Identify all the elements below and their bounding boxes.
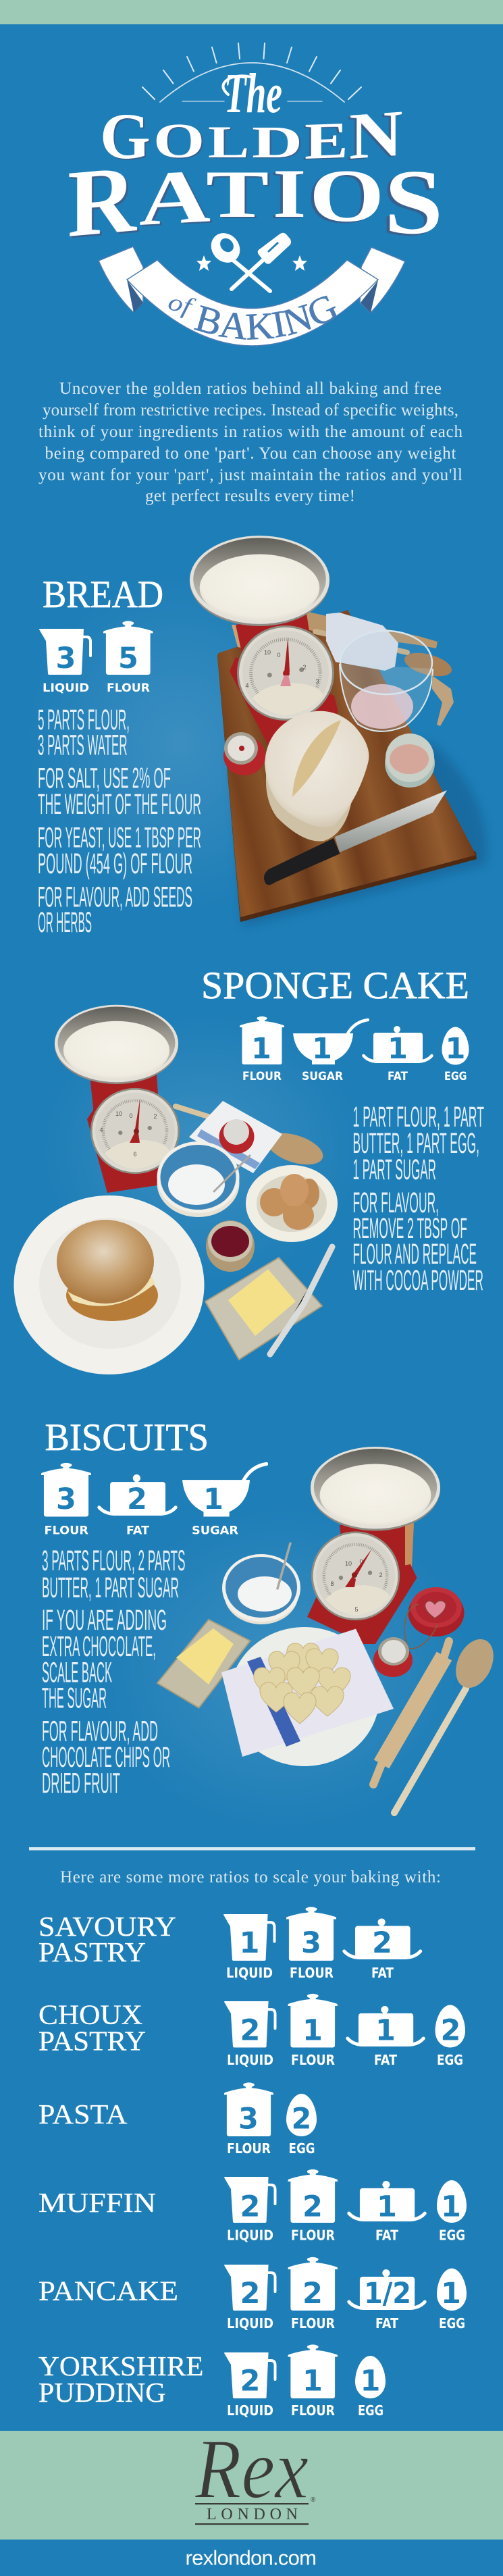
weighing pan with flour	[55, 1005, 178, 1084]
intro paragraph: get perfect results every time!	[145, 487, 355, 505]
timer	[219, 1119, 254, 1154]
row icons: FAT	[375, 2315, 398, 2332]
title word: Golden: L	[208, 117, 249, 168]
title word: The	[223, 62, 282, 125]
title word: Ratios: S	[384, 151, 443, 253]
logo: Rex London: Rex	[194, 2423, 309, 2517]
row icons: 1	[240, 1926, 259, 1960]
weighing pan with flour	[190, 536, 329, 626]
row icons: 2	[302, 2190, 323, 2223]
row icons: FLOUR	[291, 2402, 335, 2419]
section: biscuits	[41, 1416, 501, 1813]
ratio icons: sponge cake: 1	[388, 1032, 408, 1066]
row icons: EGG	[439, 2227, 465, 2244]
kitchen scale dial: 0	[359, 1558, 363, 1565]
row icons: 2	[240, 2277, 260, 2311]
row icons: 2	[441, 2014, 460, 2048]
kitchen scale dial: 4	[99, 1127, 103, 1133]
row: pancake	[38, 2257, 467, 2332]
kitchen scale base	[230, 613, 338, 745]
section: biscuits: BUTTER, 1 PART SUGAR	[42, 1572, 179, 1604]
row icons: 1	[441, 2277, 461, 2311]
row icons	[224, 2082, 317, 2157]
biscuits instructions	[42, 1545, 185, 1799]
row: pasta	[38, 2082, 317, 2157]
row icons: LIQUID	[227, 2402, 273, 2419]
website address: rexlondon.com	[185, 2546, 317, 2569]
subheading: more ratios: Here are some more ratios to scale your baking with:	[60, 1868, 441, 1886]
ratio icons: sponge cake: SUGAR	[302, 1070, 343, 1083]
kitchen scale dial: 6	[133, 1151, 137, 1158]
icons: stars	[196, 255, 307, 271]
title word: Golden: G	[100, 100, 151, 172]
intro paragraph: yourself from restrictive recipes. Instead of specific weights,	[43, 401, 458, 419]
biscuits instructions: SCALE BACK	[42, 1656, 112, 1689]
row icons: FAT	[374, 2052, 397, 2068]
row icons: 1	[375, 2014, 396, 2048]
glass measuring jug	[340, 631, 454, 731]
white plate	[230, 1627, 379, 1766]
row icons: FLOUR	[290, 1965, 334, 1981]
ratio icons: biscuits: 3	[56, 1483, 76, 1516]
row icons	[224, 2344, 386, 2419]
title word: Golden: O	[153, 113, 205, 168]
row icons: EGG	[289, 2140, 315, 2157]
row: choux pastry	[38, 1994, 465, 2068]
biscuits instructions: DRIED FRUIT	[42, 1767, 120, 1799]
section: sponge cake	[14, 964, 484, 1374]
row icons	[224, 2169, 467, 2244]
row icons: 2	[240, 2190, 260, 2223]
row icons	[224, 2257, 467, 2332]
row title: PANCAKE	[38, 2275, 178, 2306]
row icons	[224, 1994, 465, 2068]
row title: PUDDING	[38, 2377, 166, 2408]
row icons: 1	[302, 2364, 323, 2398]
title word: Golden	[100, 96, 402, 174]
row icons: FLOUR	[291, 2315, 335, 2332]
kitchen scale dial	[311, 1531, 400, 1620]
row title: CHOUX	[38, 1999, 142, 2030]
red biscuit cutter tin	[404, 1587, 465, 1649]
title word: Ratios	[68, 145, 443, 257]
banner text: BAKING	[194, 296, 336, 340]
row title	[38, 2350, 204, 2408]
row icons: FAT	[371, 1965, 394, 1981]
row icons: 1/2	[364, 2277, 411, 2311]
heading: biscuits: BISCUITS	[45, 1416, 209, 1459]
row icons: LIQUID	[227, 2227, 273, 2244]
wooden spoon	[394, 1633, 501, 1813]
footer band with logo	[0, 2423, 503, 2540]
wooden spoon	[176, 1106, 327, 1170]
row icons: 2	[372, 1926, 392, 1960]
ratio icons: bread: LIQUID	[43, 681, 89, 695]
salt jar	[385, 733, 435, 788]
bread instructions: 5 PARTS FLOUR,	[38, 704, 130, 736]
bread instructions: 3 PARTS WATER	[38, 729, 127, 762]
bread instructions: OR HERBS	[38, 906, 92, 939]
section: bread: FOR YEAST, USE 1 TBSP PER	[38, 821, 201, 854]
row title: YORKSHIRE	[38, 2350, 204, 2381]
bread loaf	[265, 711, 369, 842]
row icons: EGG	[358, 2402, 383, 2419]
rolling pin and wooden spoon	[304, 611, 454, 681]
photo: biscuit ingredients	[157, 1447, 501, 1813]
row icons: LIQUID	[226, 1965, 273, 1981]
kitchen scale dial: 3	[315, 678, 319, 685]
big plate	[14, 1195, 204, 1374]
row icons: FLOUR	[227, 2140, 271, 2157]
ratio icons: biscuits: SUGAR	[192, 1524, 238, 1537]
kitchen scale base	[307, 1523, 417, 1644]
ratio icons: biscuits: 2	[127, 1483, 147, 1516]
kitchen scale dial: 10	[115, 1110, 122, 1117]
section: bread: THE WEIGHT OF THE FLOUR	[38, 788, 201, 821]
kitchen scale dial: 2	[153, 1113, 157, 1120]
biscuits instructions: THE SUGAR	[42, 1682, 107, 1714]
row icons: 2	[240, 2014, 260, 2048]
chopping board	[217, 610, 477, 922]
row icons: 3	[238, 2102, 259, 2136]
ratio icons: biscuits: FAT	[126, 1524, 149, 1537]
ratio icons: bread: FLOUR	[107, 681, 150, 695]
sponge cake	[57, 1220, 158, 1321]
divider	[29, 1847, 475, 1851]
title word: Golden: E	[305, 111, 348, 170]
intro paragraph	[38, 380, 463, 505]
ratio icons: biscuits: FLOUR	[45, 1524, 88, 1537]
timer	[373, 1637, 413, 1677]
jar of jam	[206, 1220, 255, 1272]
heading: sponge cake: SPONGE CAKE	[201, 964, 469, 1007]
logo: Rex London: ®	[311, 2496, 316, 2504]
ratio icons: biscuits: 1	[203, 1483, 223, 1516]
banner text: of	[165, 288, 198, 321]
kitchen scale dial	[90, 1088, 180, 1174]
biscuits instructions: IF YOU ARE ADDING	[42, 1604, 167, 1637]
ratio icons: sponge cake: FAT	[388, 1070, 408, 1083]
kitchen scale dial: 10	[345, 1560, 352, 1567]
row title: PASTRY	[38, 1936, 146, 1967]
heart biscuits	[254, 1643, 350, 1724]
bread instructions	[38, 704, 201, 939]
ratio icons: sponge cake	[240, 1016, 469, 1083]
rolling pin	[373, 1641, 449, 1784]
section: biscuits: 3 PARTS FLOUR, 2 PARTS	[42, 1545, 185, 1577]
bowl of sugar	[157, 1141, 250, 1217]
butter dish	[157, 1620, 250, 1707]
photo: bread ingredients on a board	[190, 536, 487, 927]
title word: Ratios: R	[68, 145, 137, 257]
ratio icons: sponge cake: 1	[446, 1032, 465, 1066]
row: muffin	[38, 2169, 467, 2244]
row icons: FLOUR	[291, 2052, 335, 2068]
title word: Golden: D	[252, 117, 302, 168]
kitchen scale dial: 4	[245, 682, 249, 689]
row icons: FAT	[375, 2227, 398, 2244]
title word: Ratios: A	[139, 154, 211, 242]
row icons: EGG	[437, 2052, 463, 2068]
ratio icons: bread	[39, 621, 153, 695]
row title: MUFFIN	[38, 2187, 156, 2218]
bread instructions: FOR SALT, USE 2% OF	[38, 762, 171, 794]
section: bread: FOR FLAVOUR, ADD SEEDS	[38, 881, 192, 913]
ratio icons: biscuits	[41, 1463, 267, 1537]
row: yorkshire pudding	[38, 2344, 386, 2419]
row icons	[223, 1907, 421, 1981]
row icons: 3	[301, 1926, 321, 1960]
kitchen scale dial: 8	[330, 1580, 334, 1587]
title word: Ratios: T	[206, 157, 269, 232]
biscuits instructions: FOR FLAVOUR, ADD	[42, 1716, 158, 1748]
logo: Rex London: LONDON	[207, 2506, 298, 2523]
sponge cake instructions	[352, 1101, 484, 1297]
row title: SAVOURY	[38, 1911, 176, 1942]
kitchen scale dial	[237, 625, 334, 721]
bread knife	[264, 790, 447, 885]
row icons: FLOUR	[291, 2227, 335, 2244]
row title: PASTA	[38, 2098, 128, 2130]
ribbon banner	[98, 246, 406, 346]
row icons: LIQUID	[227, 2052, 273, 2068]
top green band	[0, 0, 503, 24]
timer	[223, 732, 265, 775]
section: biscuits: CHOCOLATE CHIPS OR	[42, 1741, 170, 1774]
row title: PASTRY	[38, 2025, 146, 2056]
bowl of sugar	[222, 1543, 300, 1624]
kitchen scale dial: 5	[354, 1606, 359, 1613]
row icons: 2	[302, 2277, 323, 2311]
row icons: 1	[441, 2190, 461, 2223]
intro paragraph: think of your ingredients in ratios with the amount of each	[38, 423, 463, 441]
ratio icons: bread: 5	[118, 642, 138, 675]
row icons: 1	[361, 2364, 380, 2398]
ratio icons: sponge cake: 1	[312, 1032, 332, 1066]
photo: sponge cake ingredients	[14, 1005, 338, 1374]
row icons: 2	[240, 2364, 260, 2398]
ratio icons: sponge cake: EGG	[444, 1070, 467, 1083]
row icons: 1	[302, 2014, 323, 2048]
tea towel	[326, 613, 398, 671]
row: savoury pastry	[38, 1907, 421, 1981]
row icons: LIQUID	[227, 2315, 273, 2332]
intro paragraph: you want for your 'part', just maintain the ratios and you'll	[38, 466, 462, 484]
title word: Ratios: O	[309, 154, 384, 237]
section: bread: POUND (454 G) OF FLOUR	[38, 848, 192, 880]
kitchen scale dial: 10	[264, 649, 271, 656]
ratio icons: bread: 3	[56, 642, 76, 675]
kitchen scale dial: 0	[129, 1112, 133, 1119]
row icons: 2	[292, 2102, 311, 2136]
sun rays and arc	[142, 43, 361, 102]
heading: bread: BREAD	[43, 573, 163, 616]
section: bread	[38, 536, 487, 939]
tea towel	[221, 1629, 394, 1757]
ratio icons: sponge cake: FLOUR	[242, 1070, 282, 1083]
tea towel	[189, 1101, 282, 1173]
row title	[38, 1911, 176, 1967]
row title	[38, 1999, 146, 2056]
intro paragraph: being compared to one 'part'. You can choose any weight	[45, 444, 456, 463]
kitchen scale dial: 0	[277, 652, 281, 659]
title lockup	[68, 43, 443, 346]
ratio icons: sponge cake: 1	[251, 1032, 271, 1066]
intro paragraph: Uncover the golden ratios behind all baking and free	[59, 380, 442, 398]
kitchen scale base	[87, 1074, 161, 1193]
icon: crossed spoon and spatula	[205, 228, 291, 291]
section: biscuits: EXTRA CHOCOLATE,	[42, 1630, 156, 1663]
butter dish with knife	[205, 1247, 332, 1360]
row icons: EGG	[439, 2315, 465, 2332]
kitchen scale dial: 2	[379, 1572, 383, 1578]
kitchen scale dial: 2	[302, 664, 307, 671]
title word: Ratios: I	[273, 155, 306, 232]
title word: The: The	[224, 62, 282, 125]
weighing pan with flour	[311, 1447, 440, 1530]
title word: Golden: N	[349, 96, 402, 174]
plate of eggs	[246, 1165, 338, 1242]
row icons: 1	[377, 2190, 397, 2223]
